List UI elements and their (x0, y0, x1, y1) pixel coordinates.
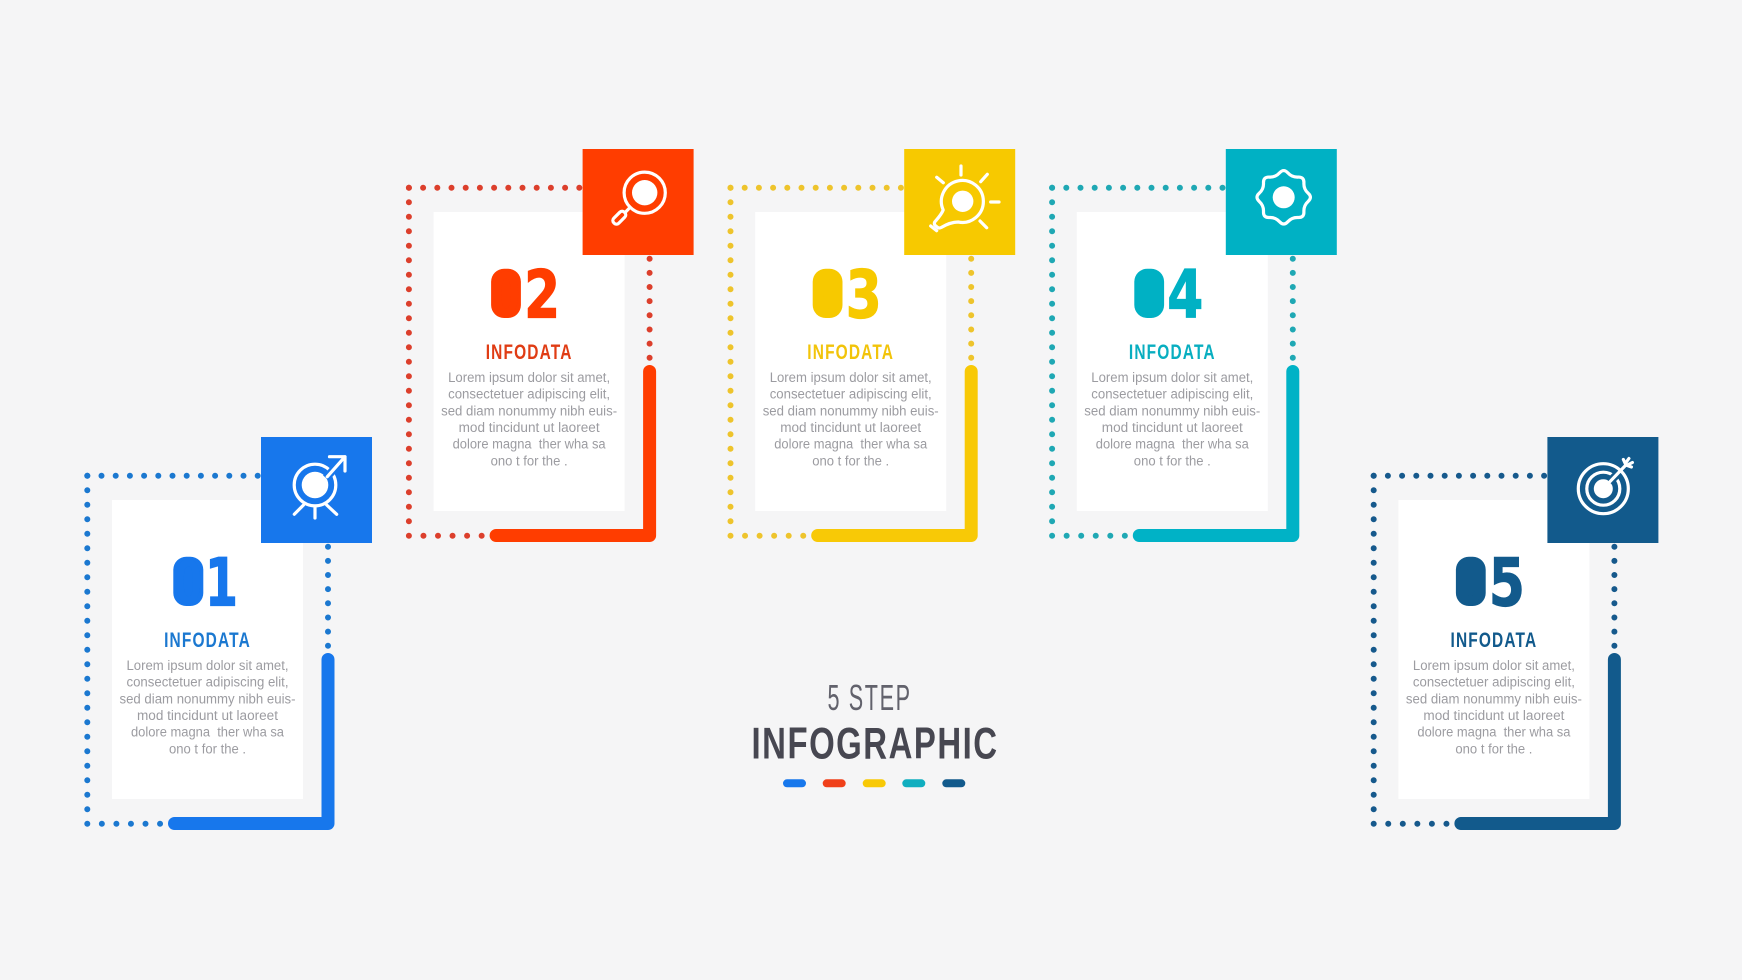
body text: Lorem ipsum dolor sit amet, (770, 370, 932, 386)
body text: dolore magna ther wha sa (453, 437, 606, 453)
body text: Lorem ipsum dolor sit amet, (448, 370, 610, 386)
heading: INFODATA (1129, 339, 1216, 364)
step number: 0 (492, 260, 520, 330)
title: INFOGRAPHIC: INFOGRAPHIC (752, 720, 999, 769)
solid corner line (496, 372, 650, 536)
card (1398, 500, 1589, 799)
step number (173, 544, 238, 622)
step number: 5 (1489, 544, 1525, 622)
body text (441, 370, 617, 469)
body text: sed diam nonummy nibh euis- (120, 691, 296, 707)
body text: mod tincidunt ut laoreet (137, 708, 278, 724)
body text: ono t for the . (812, 453, 889, 469)
card (112, 500, 303, 799)
body text (763, 370, 939, 469)
solid corner line (1461, 660, 1614, 824)
body text: consectetuer adipiscing elit, (448, 387, 610, 403)
title block (752, 678, 999, 787)
body text: Lorem ipsum dolor sit amet, (1413, 658, 1575, 674)
body text: mod tincidunt ut laoreet (1102, 420, 1243, 436)
body text: consectetuer adipiscing elit, (1091, 387, 1253, 403)
body text: ono t for the . (1134, 453, 1211, 469)
dotted frame (1052, 188, 1293, 536)
body text (120, 658, 296, 757)
panel: step 5 (1374, 437, 1658, 824)
subtitle: 5 STEP: 5 STEP (828, 678, 912, 718)
body text: dolore magna ther wha sa (1417, 725, 1570, 741)
heading: INFODATA (1450, 627, 1537, 652)
dotted frame (87, 476, 328, 824)
body text: sed diam nonummy nibh euis- (1406, 691, 1582, 707)
body text: consectetuer adipiscing elit, (1413, 675, 1575, 691)
panel: step 4 (1052, 149, 1337, 536)
body text: consectetuer adipiscing elit, (770, 387, 932, 403)
body text: Lorem ipsum dolor sit amet, (1091, 370, 1253, 386)
step number: 3 (846, 256, 882, 334)
card (755, 212, 946, 511)
solid corner line (174, 660, 328, 824)
body text: sed diam nonummy nibh euis- (441, 403, 617, 419)
body text (1084, 370, 1261, 469)
body text: mod tincidunt ut laoreet (459, 420, 600, 436)
solid corner line (818, 372, 971, 536)
heading: INFODATA (807, 339, 894, 364)
panel: step 2 (409, 149, 694, 536)
card (1077, 212, 1268, 511)
panel: step 3 (730, 149, 1015, 536)
step number: 4 (1167, 256, 1203, 334)
body text: consectetuer adipiscing elit, (126, 675, 288, 691)
body text: ono t for the . (169, 741, 246, 757)
solid corner line (1139, 372, 1293, 536)
body text: Lorem ipsum dolor sit amet, (126, 658, 288, 674)
body text: sed diam nonummy nibh euis- (763, 403, 939, 419)
heading: INFODATA (486, 339, 573, 364)
step number: 2 (524, 256, 560, 334)
body text (1406, 658, 1582, 757)
body text: ono t for the . (1455, 741, 1532, 757)
step number: 0 (1135, 260, 1163, 330)
body text: dolore magna ther wha sa (131, 725, 284, 741)
dotted frame (409, 188, 650, 536)
step number: 0 (1457, 548, 1485, 618)
step number (1134, 256, 1203, 334)
heading: INFODATA (164, 627, 251, 652)
icon: magnifying glass (583, 149, 694, 255)
step number (813, 256, 882, 334)
icon: bullseye target (1547, 437, 1658, 543)
colour legend pills (783, 779, 965, 787)
icon: light bulb (904, 149, 1015, 255)
body text: mod tincidunt ut laoreet (780, 420, 921, 436)
body text: dolore magna ther wha sa (774, 437, 927, 453)
body text: dolore magna ther wha sa (1096, 437, 1249, 453)
card (434, 212, 625, 511)
body text: mod tincidunt ut laoreet (1423, 708, 1564, 724)
dotted frame (1374, 476, 1614, 824)
step number: 0 (174, 548, 202, 618)
panel: step 1 (87, 437, 372, 824)
body text: sed diam nonummy nibh euis- (1084, 403, 1261, 419)
body text: ono t for the . (491, 453, 568, 469)
step number: 1 (205, 544, 238, 622)
step number (1456, 544, 1525, 622)
icon: arrow target (261, 437, 372, 543)
icon: gear (1226, 149, 1337, 255)
step number: 0 (814, 260, 842, 330)
step number (491, 256, 560, 334)
dotted frame (730, 188, 971, 536)
